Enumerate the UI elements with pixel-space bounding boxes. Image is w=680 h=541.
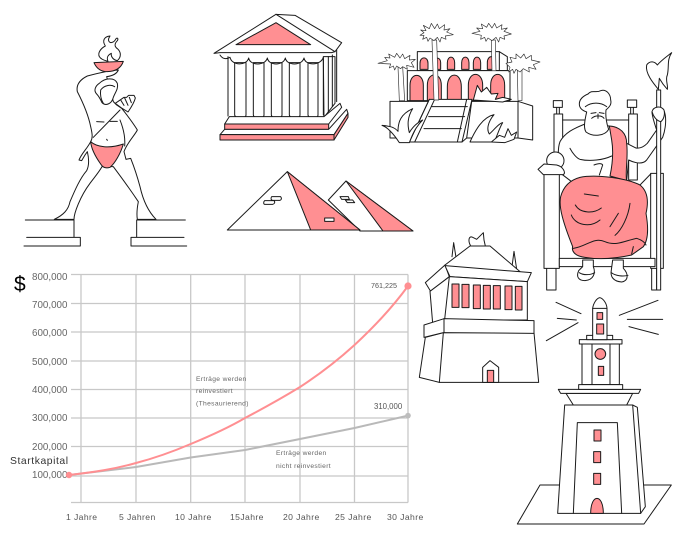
- front pyramid: [227, 172, 360, 230]
- loincloth: [91, 142, 123, 168]
- doorway: [483, 361, 499, 382]
- icon: flame: [99, 36, 120, 61]
- windows: [452, 284, 522, 310]
- left plinth: [24, 220, 80, 246]
- y axis labels: 400,000: [32, 385, 68, 396]
- annotation: not reinvested: Erträge werden: [276, 450, 327, 457]
- tower body: [558, 405, 645, 513]
- annotation: reinvested: Erträge werden: [196, 376, 247, 383]
- illustration: Mausoleum: [419, 233, 539, 382]
- end point not reinvested: [405, 413, 411, 418]
- columns: [220, 55, 323, 118]
- illustration: Hanging Gardens of Babylon: [378, 23, 540, 143]
- icon: torch bowl: [94, 61, 123, 72]
- roof: [445, 246, 520, 272]
- cornice: [425, 265, 449, 291]
- platform ground: [517, 485, 671, 524]
- mid tower: [582, 344, 619, 385]
- pink robe drape: [609, 126, 627, 181]
- pink robe lap: [560, 176, 648, 259]
- annotation: not reinvested: nicht reinvestiert: [276, 463, 331, 470]
- hand on orb: [538, 164, 564, 175]
- line: not reinvested: [69, 416, 408, 475]
- front pyramid blocks: [264, 197, 281, 204]
- start point: [66, 472, 72, 478]
- roof: [214, 14, 342, 53]
- x axis labels: [66, 512, 424, 522]
- palm trees: [378, 23, 540, 101]
- x axis labels: 25 Jahre: [335, 512, 372, 522]
- robe folds: [571, 194, 646, 254]
- illustration: Colossus of Rhodes: [24, 36, 187, 246]
- pink pediment: [236, 23, 311, 45]
- x axis labels: 20 Jahre: [283, 512, 320, 522]
- statue on roof: [469, 233, 485, 246]
- top tower: [587, 335, 613, 340]
- icon: quiver: [115, 95, 135, 112]
- icon: thunderbolt flame: [646, 53, 672, 89]
- lower arches: [410, 74, 505, 101]
- hand on staff: [652, 107, 664, 122]
- roof finials: [452, 243, 517, 269]
- throne: [544, 100, 663, 290]
- shrubs: [473, 85, 511, 102]
- figure body: [54, 70, 156, 219]
- y axis labels: 100,000: [32, 470, 68, 481]
- staff: [657, 90, 661, 290]
- start capital label: Startkapital: [10, 456, 69, 467]
- head and beard: [579, 90, 611, 135]
- lower terrace: [390, 101, 518, 138]
- y axis labels: 500,000: [32, 357, 68, 368]
- y axis labels: [32, 272, 68, 481]
- value label 761,225: 761,225: [371, 281, 397, 290]
- staircase: [409, 99, 472, 142]
- illustration: Statue of Zeus: [538, 53, 672, 290]
- right plinth: [131, 220, 187, 246]
- gallery: [566, 393, 633, 405]
- lower storey: [419, 333, 539, 382]
- mid tower ornaments: [595, 349, 606, 359]
- x axis labels: 15Jahre: [230, 512, 264, 522]
- y axis labels: 600,000: [32, 328, 68, 339]
- chart grid: [71, 274, 408, 502]
- torso details: [93, 110, 125, 146]
- torso and arms: [558, 108, 666, 182]
- upper terrace: [417, 52, 507, 71]
- rear pyramid blocks: [340, 197, 355, 203]
- end point reinvested: [404, 282, 412, 290]
- line: reinvested: [69, 286, 408, 475]
- x axis labels: 1 Jahre: [66, 512, 97, 522]
- middle terrace: [407, 71, 510, 101]
- light rays: [546, 300, 663, 341]
- x axis labels: 5 Jahren: [119, 512, 156, 522]
- y axis labels: 700,000: [32, 300, 68, 311]
- orb: [547, 152, 564, 169]
- x axis labels: 30 Jahre: [387, 512, 424, 522]
- illustration: Lighthouse of Alexandria: [517, 298, 671, 524]
- hair and face: [95, 79, 118, 104]
- illustration: Pyramids of Giza: [227, 172, 413, 231]
- stepped base: [225, 103, 342, 124]
- x axis labels: 10 Jahre: [175, 512, 212, 522]
- top tower windows: [597, 313, 603, 319]
- sandals: [578, 260, 594, 281]
- upper arches: [420, 57, 495, 69]
- annotation: reinvested: reinvestiert: [196, 388, 233, 395]
- band: [424, 319, 534, 337]
- value label 310,000: 310,000: [374, 402, 403, 411]
- tower windows: [591, 430, 603, 513]
- y axis labels: 300,000: [32, 413, 68, 424]
- upper storey: [430, 277, 527, 323]
- annotation: reinvested: (Thesaurierend): [196, 400, 249, 408]
- y axis labels: 800,000: [32, 272, 68, 283]
- rear pyramid: [328, 181, 413, 231]
- chart: capital growth over 30 years: [10, 272, 424, 522]
- temple side wall: [323, 57, 335, 117]
- currency symbol: $: [14, 273, 26, 296]
- y axis labels: 200,000: [32, 442, 68, 453]
- illustration: Temple of Artemis: [214, 14, 348, 140]
